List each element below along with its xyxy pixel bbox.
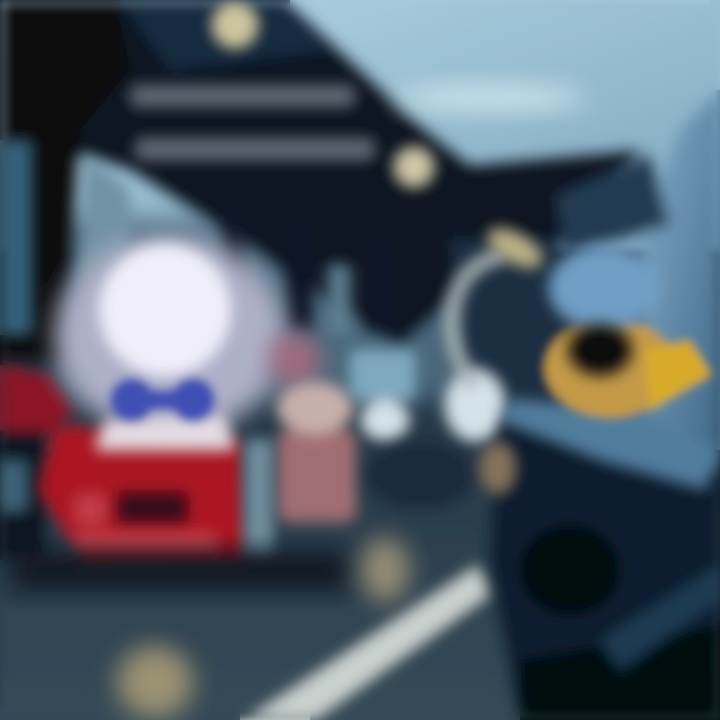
road bbox=[0, 250, 720, 720]
central white glow bbox=[350, 350, 505, 441]
white orb bbox=[99, 244, 231, 376]
headlight gold crescent bbox=[544, 318, 676, 418]
yellow beak bbox=[645, 340, 712, 410]
top lamp bbox=[212, 2, 258, 48]
car shadow bbox=[10, 552, 350, 590]
dark central car bbox=[365, 441, 475, 509]
sky bbox=[0, 0, 720, 260]
pink side halo bbox=[269, 334, 321, 386]
pale pillar bbox=[245, 440, 273, 555]
road reflections bbox=[117, 538, 409, 718]
character halo bbox=[55, 235, 285, 435]
bridge pillars bbox=[222, 210, 395, 335]
bridge structure bbox=[0, 0, 640, 400]
road white line bbox=[245, 565, 490, 720]
yellow accent bbox=[482, 221, 548, 275]
caption placeholder blur streaks bbox=[130, 85, 375, 160]
left red car bbox=[0, 365, 75, 560]
right car body bbox=[490, 420, 720, 720]
red car body bbox=[38, 425, 245, 565]
headlight center bbox=[568, 324, 632, 376]
right car hood bbox=[500, 90, 720, 490]
mid background haze bbox=[60, 220, 460, 400]
sky highlight bbox=[395, 84, 585, 112]
brown accent bbox=[480, 442, 516, 494]
pink cup bbox=[277, 382, 356, 522]
pale panels left bbox=[0, 140, 130, 335]
blue cap bbox=[549, 246, 661, 330]
mid lamp bbox=[394, 147, 434, 187]
pale ring bbox=[452, 255, 505, 385]
blue bow bbox=[110, 378, 215, 422]
white band bbox=[95, 415, 235, 450]
